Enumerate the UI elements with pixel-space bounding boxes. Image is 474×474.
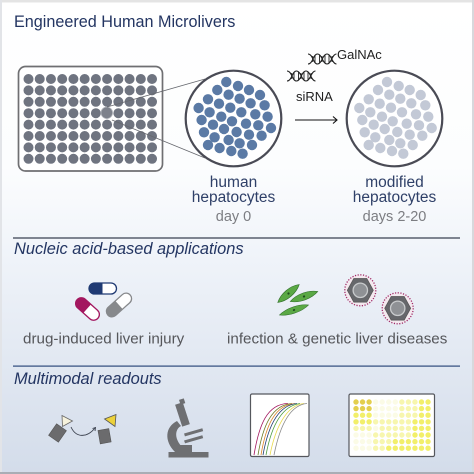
icon: parasite cells [275, 282, 319, 318]
icon: viruses [345, 275, 413, 324]
title: Engineered Human Microlivers [14, 13, 235, 31]
well plate [18, 66, 162, 171]
plate reader plate [349, 394, 434, 456]
arrow [295, 116, 337, 124]
circle: modified hepatocytes [347, 71, 442, 166]
label: modified hepatocytes days 2-20: hepatocytes [353, 189, 437, 206]
icon: pills [73, 283, 134, 323]
icon: GalNAc strand [308, 54, 336, 64]
icon: substrate conversion [49, 414, 116, 444]
heading: applications: Nucleic acid-based applications [14, 240, 244, 258]
label: human hepatocytes day 0: human [210, 174, 257, 191]
siRNA label: siRNA [296, 89, 333, 104]
icon: microscope [167, 398, 208, 458]
label: infection and genetic liver diseases: infection & genetic liver diseases [227, 330, 448, 348]
heading: readouts: Multimodal readouts [14, 370, 162, 388]
chart: growth curves [250, 394, 309, 456]
GalNAc label: GalNAc [337, 47, 382, 62]
circle: human hepatocytes [186, 71, 281, 166]
divider [13, 366, 460, 367]
label: human hepatocytes day 0 [192, 174, 276, 225]
icon: siRNA strand [287, 71, 316, 81]
label: drug-induced liver injury: drug-induced liver injury [23, 330, 185, 348]
zoom lines [107, 79, 205, 158]
label: modified hepatocytes days 2-20 [353, 174, 437, 225]
divider [13, 237, 460, 239]
label: modified hepatocytes days 2-20: days 2-20 [363, 209, 426, 225]
label: modified hepatocytes days 2-20: modified [365, 174, 424, 191]
label: human hepatocytes day 0: day 0 [216, 209, 251, 225]
label: human hepatocytes day 0: hepatocytes [192, 189, 276, 206]
